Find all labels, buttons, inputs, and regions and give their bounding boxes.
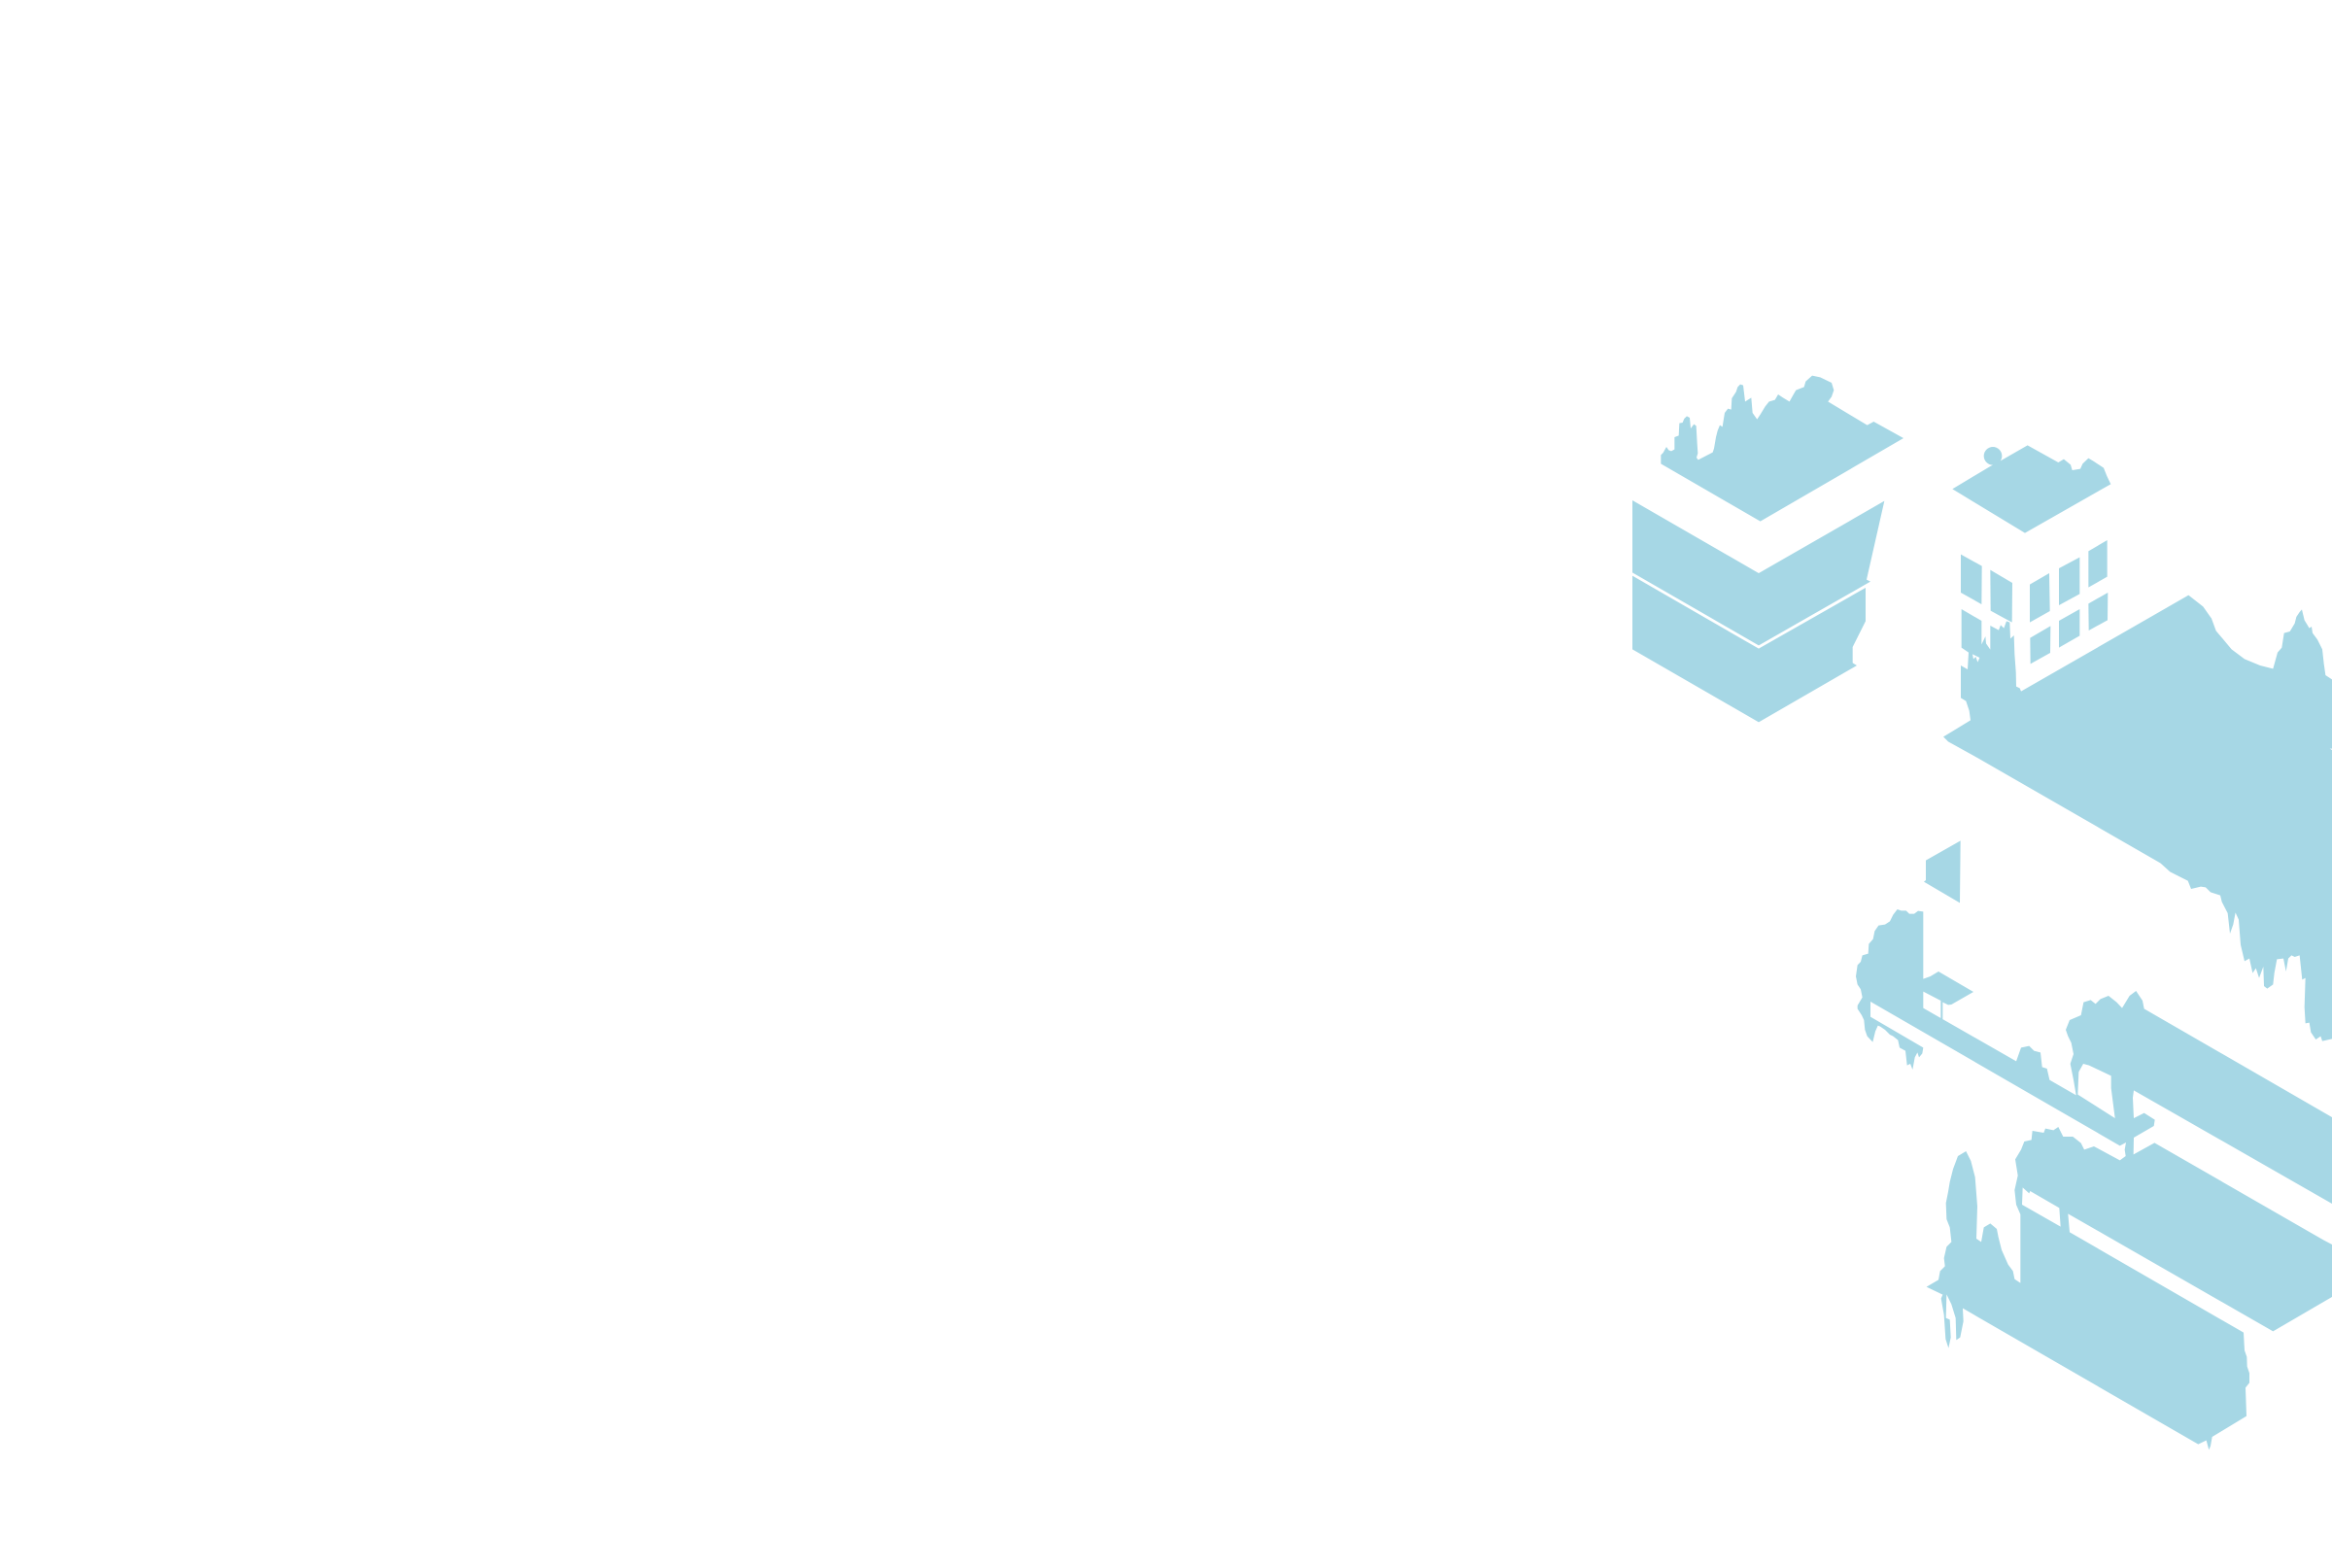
window: right wall lower third [2088, 593, 2108, 631]
gap under tree canopy [2077, 1064, 2115, 1118]
stacked block: terrace with trees and two chevron layers [1632, 376, 1903, 722]
small gap in shrub [1972, 654, 1979, 663]
windows: left wall upper [1961, 555, 1982, 604]
window: right wall upper third [2088, 540, 2108, 588]
window: right wall lower second [2059, 609, 2079, 648]
window: right wall upper first [2030, 573, 2050, 623]
window: left wall upper second [1990, 570, 2012, 623]
window: right wall lower first [2030, 626, 2050, 664]
upper chevron layer [1632, 500, 1884, 645]
roof slab with shrubs [1952, 445, 2110, 533]
small tick on right edge [2330, 749, 2332, 750]
building: roof, windows and large platform with trees [1943, 445, 2332, 1041]
small wall fragment [1924, 840, 1961, 903]
lower blocks: stepped strips, trees, canopy [1856, 909, 2332, 1449]
terrace roof with tree line [1661, 376, 1903, 522]
connected strips with tree line [1856, 909, 2332, 1449]
gap between lower strips [2022, 1187, 2061, 1227]
rooftop round shrub [1984, 447, 2002, 465]
window: right wall upper second [2059, 558, 2079, 605]
lower chevron layer [1632, 576, 1866, 722]
platform with shrubs and tree canopy [1943, 596, 2332, 1041]
